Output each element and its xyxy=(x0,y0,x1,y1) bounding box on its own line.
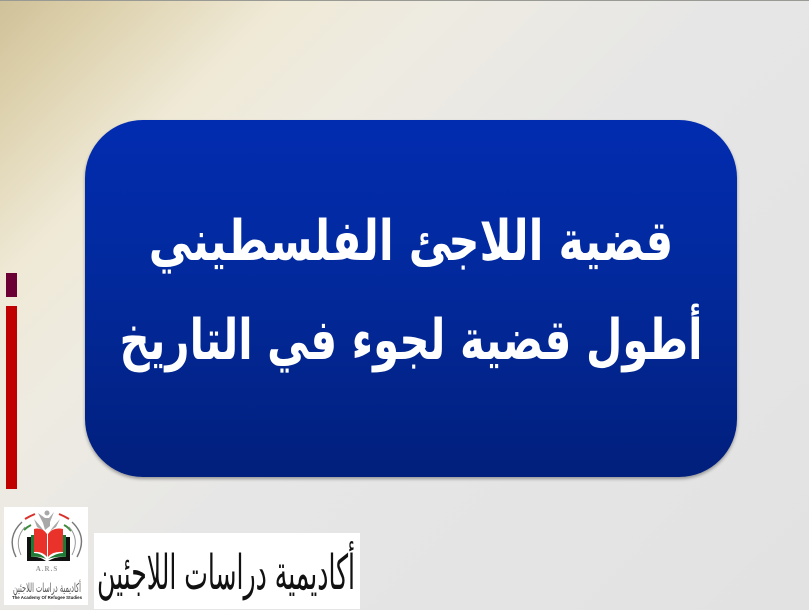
logo initials: A.R.S xyxy=(36,565,58,573)
icon: figure above book xyxy=(34,510,60,531)
logo: arabic calligraphy wordmark xyxy=(94,533,360,609)
icon: coloured arcs xyxy=(12,514,81,557)
top edge strip xyxy=(0,0,809,1)
panel: title box xyxy=(85,120,737,477)
heading line 2: أطول قضية لجوء في التاريخ xyxy=(119,308,703,373)
icon: open book xyxy=(27,529,70,561)
accent bar: red xyxy=(6,306,17,489)
heading line 1: قضية اللاجئ الفلسطيني xyxy=(149,209,673,274)
logo english name: The Academy Of Refugee Studies xyxy=(12,595,83,600)
logo: academy emblem xyxy=(4,507,88,605)
accent bar: maroon xyxy=(6,273,17,297)
